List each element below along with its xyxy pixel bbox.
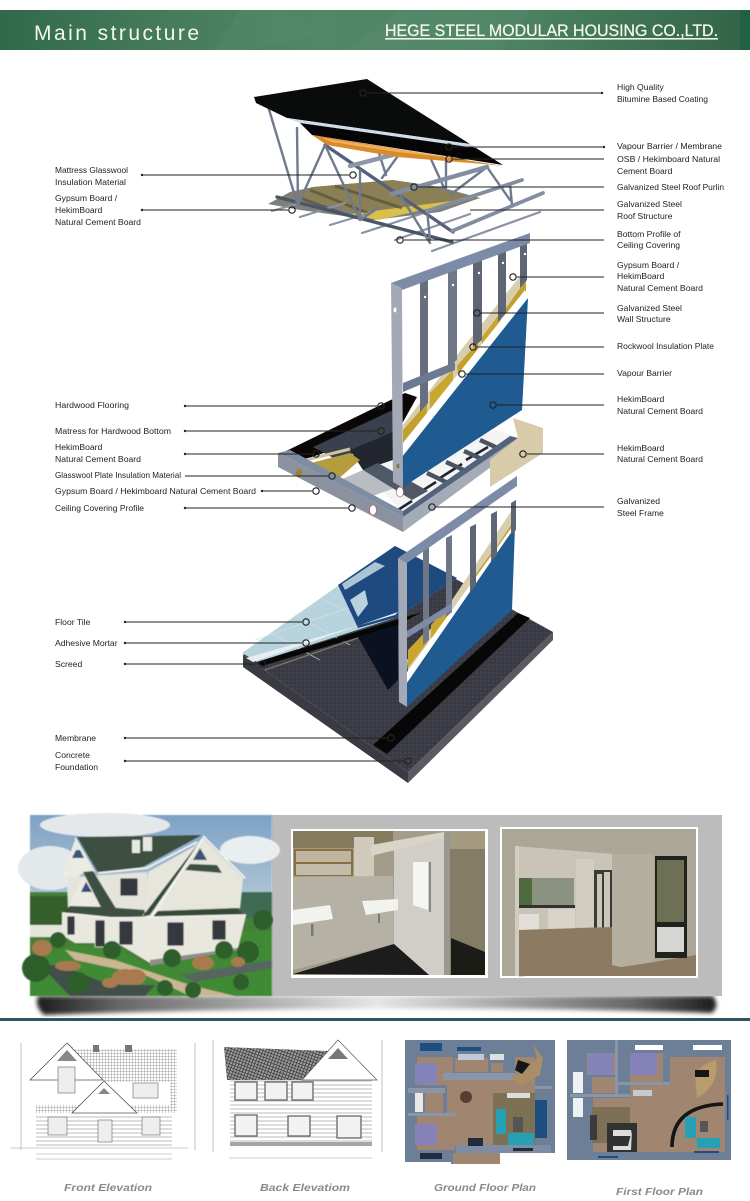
plan: first floor (567, 1040, 731, 1160)
label: gypsum board right: HekimBoard (617, 271, 665, 281)
label: roof purlin (411, 182, 724, 192)
blue cement board (402, 298, 528, 487)
wall insulation (403, 270, 526, 443)
label: ceiling profile: Ceiling Covering Profile (55, 503, 144, 513)
label: hardwood flooring (55, 400, 384, 410)
label: ceiling profile (55, 503, 355, 513)
label: bitumen coating: Bitumine Based Coating (617, 94, 708, 104)
label: hardwood flooring: Hardwood Flooring (55, 400, 129, 410)
label: hekimboard box: Natural Cement Board (617, 454, 703, 464)
ground floor (62, 913, 246, 963)
end insulation box (490, 418, 543, 487)
label: rockwool (470, 341, 714, 351)
windows (67, 878, 226, 947)
label: vapour barrier (459, 368, 672, 378)
caption: ground floor plan: Ground Floor Plan (434, 1182, 536, 1194)
main roof (77, 835, 202, 873)
second floor (67, 872, 148, 912)
label: roof structure: Roof Structure (617, 211, 673, 221)
caption: first floor plan: First Floor Plan (616, 1186, 703, 1198)
label: gypsum board roof: HekimBoard (55, 205, 103, 215)
label: floor tile: Floor Tile (55, 617, 91, 627)
label: bottom profile: Ceiling Covering (617, 240, 680, 250)
labels: left side (55, 165, 411, 772)
photo: bathroom (291, 829, 488, 978)
photo: house exterior (18, 813, 280, 998)
label: matress bottom (55, 426, 384, 436)
label: roof purlin: Galvanized Steel Roof Purlin (617, 182, 724, 192)
company name: HEGE STEEL MODULAR HOUSING CO.,LTD. (385, 21, 718, 40)
caption: back elevation: Back Elevatiom (260, 1182, 350, 1194)
label: adhesive mortar: Adhesive Mortar (55, 638, 118, 648)
caption: front elevation: Front Elevation (64, 1182, 152, 1194)
lower blue board (407, 527, 515, 707)
insulation mat (268, 180, 480, 220)
label: roof structure: Galvanized Steel (617, 199, 682, 209)
dormer (68, 877, 102, 912)
header banner (0, 10, 750, 50)
label: adhesive mortar (55, 638, 309, 648)
label: steel frame (429, 496, 664, 518)
label: steel frame: Galvanized (617, 496, 660, 506)
left gable (62, 840, 93, 877)
label: glasswool plate: Glasswool Plate Insulation Material (55, 470, 181, 480)
label: concrete foundation: Concrete (55, 750, 90, 760)
label: concrete foundation: Foundation (55, 762, 98, 772)
label: floor tile (55, 617, 309, 627)
vapour barrier (287, 118, 476, 148)
label: mattress glasswool: Mattress Glasswool (55, 165, 128, 175)
label: wall structure (474, 303, 682, 324)
label: bitumen coating: High Quality (617, 82, 665, 92)
OSB board (312, 135, 503, 166)
label: gypsum hekimboard: Gypsum Board / Hekimboard Natural Cement Board (55, 486, 256, 496)
panel shadow (37, 996, 716, 1015)
label: gypsum board roof (55, 193, 295, 227)
label: vapour barrier membrane (446, 141, 722, 151)
divider line (0, 1018, 750, 1021)
label: vapour barrier: Vapour Barrier (617, 368, 672, 378)
plan: ground floor (405, 1040, 555, 1164)
label: mattress glasswool: Insulation Material (55, 177, 126, 187)
membrane strip (373, 613, 530, 754)
concrete slab (243, 546, 553, 783)
lower white gap (407, 527, 515, 683)
photo: living room (500, 827, 698, 978)
label: gypsum board right (510, 260, 703, 293)
right gable (145, 838, 243, 915)
label: screed (55, 659, 265, 669)
label: vapour barrier membrane: Vapour Barrier / Membrane (617, 141, 722, 151)
label: gypsum board roof: Natural Cement Board (55, 217, 141, 227)
label: steel frame: Steel Frame (617, 508, 664, 518)
label: screed: Screed (55, 659, 82, 669)
label: gypsum board roof: Gypsum Board / (55, 193, 118, 203)
label: mattress glasswool (55, 165, 356, 187)
label: bottom profile: Bottom Profile of (617, 229, 681, 239)
upper wall and floor assembly (278, 233, 543, 532)
drawing: back elevation (213, 1040, 382, 1158)
label: hekimboard box (520, 443, 703, 464)
floor tile (242, 546, 457, 690)
label: hekimboard wall: Natural Cement Board (617, 406, 703, 416)
label: hekimboard box: HekimBoard (617, 443, 665, 453)
label: glasswool plate (55, 470, 335, 480)
bitumen coating (254, 79, 470, 144)
label: OSB board (446, 154, 720, 176)
label: hekimboard wall (490, 394, 703, 416)
label: hekimboard wall: HekimBoard (617, 394, 665, 404)
label: OSB board: Cement Board (617, 166, 673, 176)
wall frame (391, 233, 530, 488)
title: Main structure (34, 22, 199, 45)
grey photo panel (272, 815, 722, 996)
label: membrane (55, 733, 394, 743)
lower wall frame (398, 476, 517, 707)
label: gypsum board right: Natural Cement Board (617, 283, 703, 293)
label: hekimboard floor: HekimBoard (55, 442, 103, 452)
floor frame (278, 393, 518, 532)
label: bottom profile (397, 229, 681, 250)
drawing: front elevation (10, 1043, 195, 1159)
label: wall structure: Wall Structure (617, 314, 671, 324)
white gap (402, 290, 528, 457)
label: bitumen coating (360, 82, 708, 104)
label: gypsum board right: Gypsum Board / (617, 260, 680, 270)
steel truss (268, 106, 543, 251)
label: rockwool: Rockwool Insulation Plate (617, 341, 714, 351)
roof assembly (254, 79, 543, 251)
label: roof structure (470, 199, 682, 221)
label: concrete foundation (55, 750, 411, 772)
lower wall and foundation (242, 476, 553, 783)
labels: right side (360, 82, 724, 518)
label: matress bottom: Matress for Hardwood Bottom (55, 426, 171, 436)
label: wall structure: Galvanized Steel (617, 303, 682, 313)
label: hekimboard floor (55, 442, 319, 464)
lower wall insulation (407, 510, 514, 672)
label: hekimboard floor: Natural Cement Board (55, 454, 141, 464)
label: membrane: Membrane (55, 733, 96, 743)
label: OSB board: OSB / Hekimboard Natural (617, 154, 720, 164)
